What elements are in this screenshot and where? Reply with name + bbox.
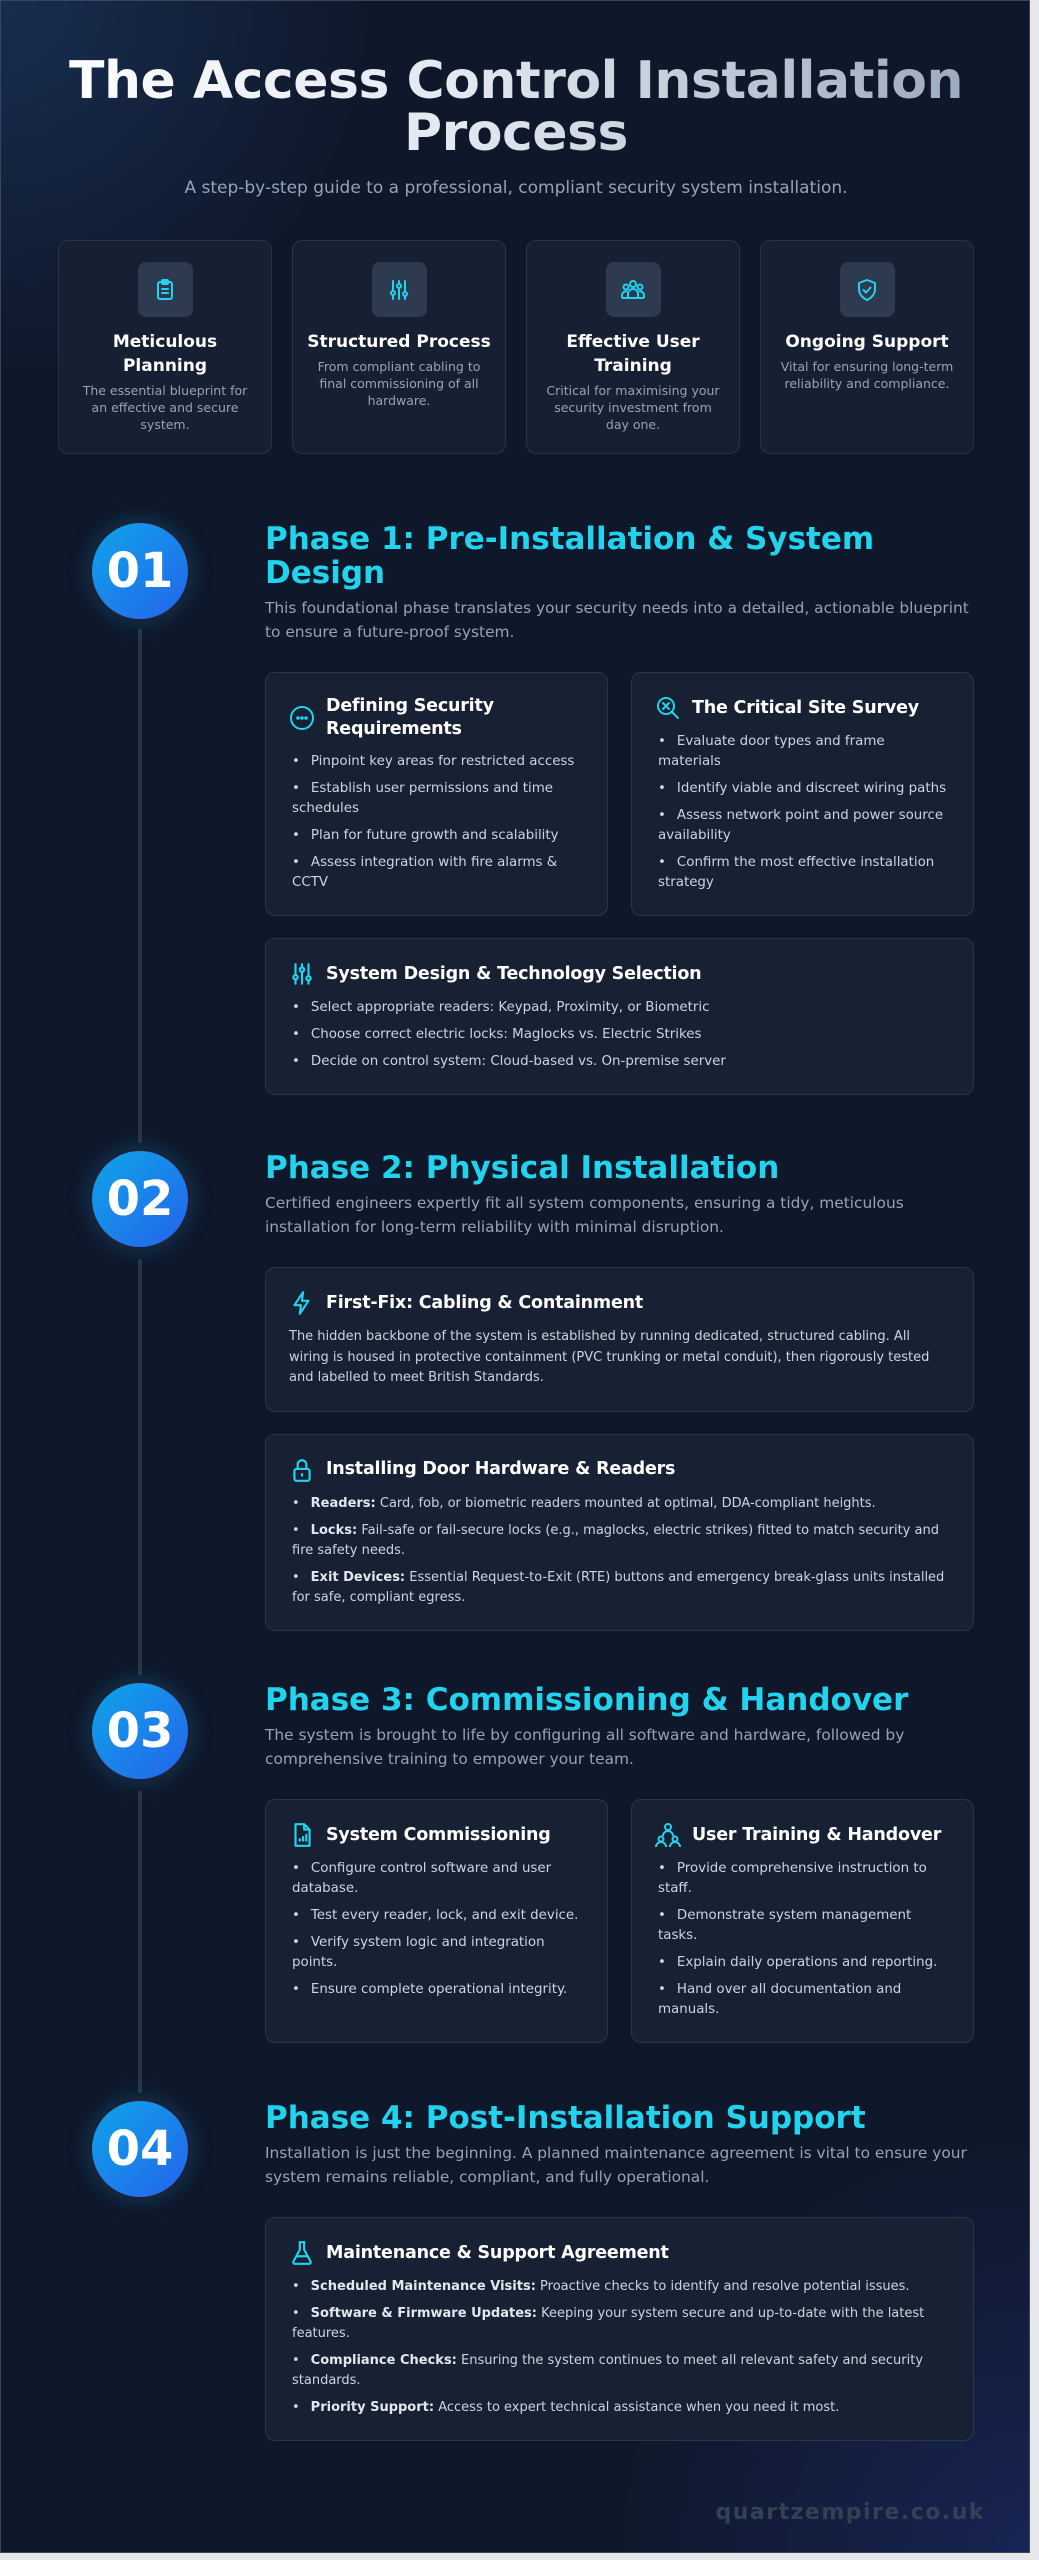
phase 4 number — [92, 2101, 188, 2197]
subtitle: A step-by-step guide to a professional, compliant security system installation. — [184, 178, 848, 198]
card: maintenance & support agreement: Priority Support: Access to expert technical assistance when you need it most. — [311, 2400, 839, 2415]
card: system commissioning: Verify system logic and integration points. — [292, 1935, 545, 1970]
card: system commissioning: Configure control software and user database. — [292, 1861, 551, 1896]
card: defining security requirements: Defining Security Requirements — [326, 696, 494, 739]
card: maintenance & support agreement: Software & Firmware Updates: Keeping your system secure and up-to-date with the latest features. — [292, 2306, 924, 2341]
card: effective user training: Effective User Training — [566, 332, 700, 376]
phase 3 number: 03 — [107, 1703, 173, 1759]
card: system design & technology selection: System Design & Technology Selection — [326, 964, 701, 984]
card: defining security requirements: Assess integration with fire alarms & CCTV — [292, 855, 557, 890]
card: structured process: From compliant cabling to final commissioning of all hardware. — [318, 359, 480, 408]
card: critical site survey: materials — [658, 754, 721, 769]
card: door hardware & readers: Readers: Card, fob, or biometric readers mounted at optimal, DDA-compliant heights. — [311, 1496, 876, 1510]
card: user training & handover: Provide comprehensive instruction to staff. — [658, 1861, 927, 1896]
phase 1 — [264, 521, 974, 1095]
card: maintenance & support agreement: Maintenance & Support Agreement — [326, 2242, 669, 2262]
card: ongoing support: Vital for ensuring long-term reliability and compliance. — [781, 359, 953, 391]
card: structured process: Structured Process — [307, 332, 491, 352]
phase 3 number — [92, 1683, 188, 1779]
card: user training & handover: Explain daily operations and reporting. — [677, 1955, 937, 1970]
phase 1 number: 01 — [107, 543, 173, 599]
card: defining security requirements: Plan for future growth and scalability — [311, 828, 559, 843]
card: effective user training — [526, 240, 740, 454]
phase 4 — [265, 2100, 974, 2441]
card: maintenance & support agreement — [265, 2217, 974, 2441]
card: system commissioning — [265, 1799, 608, 2043]
card: critical site survey: Evaluate door types and frame — [677, 734, 885, 749]
card: maintenance & support agreement: Scheduled Maintenance Visits: Proactive checks to identify and resolve potential issues. — [311, 2279, 910, 2294]
card: system design & technology selection: Choose correct electric locks: Maglocks vs. Electric Strikes — [311, 1027, 701, 1042]
footer brand: quartzempire.co.uk — [716, 2500, 985, 2525]
card: door hardware & readers: Installing Door Hardware & Readers — [326, 1459, 675, 1479]
card: system commissioning: System Commissioning — [326, 1824, 551, 1844]
card: user training & handover — [631, 1799, 974, 2043]
card: meticulous planning: The essential blueprint for an effective and secure system. — [83, 383, 247, 432]
phase 4: Phase 4: Post-Installation Support — [265, 2100, 866, 2136]
card: door hardware & readers: Exit Devices: Essential Request-to-Exit (RTE) buttons and emergency break-glass units installed for safe, compliant egress. — [292, 1570, 944, 1604]
phase 4: Installation is just the beginning. A planned maintenance agreement is vital to ensure your system remains reliable, compliant, and fully operational. — [265, 2144, 967, 2186]
card: first-fix cabling: First-Fix: Cabling & Containment — [326, 1292, 643, 1312]
phase 1: Phase 1: Pre-Installation & System Design — [265, 521, 874, 591]
card: structured process — [292, 240, 506, 454]
card: effective user training: Critical for maximising your security investment from day one. — [546, 383, 720, 432]
card: system commissioning: Ensure complete operational integrity. — [311, 1982, 567, 1997]
card: maintenance & support agreement: Compliance Checks: Ensuring the system continues to meet all relevant safety and security standards. — [292, 2353, 923, 2388]
title: The Access Control Installation — [69, 51, 963, 111]
card: critical site survey — [631, 672, 974, 916]
phase 2 — [265, 1150, 974, 1631]
card: critical site survey: Identify viable and discreet wiring paths — [677, 781, 946, 796]
card: critical site survey: Confirm the most effective installation strategy — [658, 855, 934, 890]
card: critical site survey: Assess network point and power source availability — [658, 808, 943, 843]
card: first-fix cabling: The hidden backbone of the system is established by running dedicated, structured cabling. All wiring is housed in protective containment (PVC trunking or metal conduit), then rigorously tested and labelled to meet British Standards. — [289, 1329, 929, 1385]
card: ongoing support — [760, 240, 974, 454]
card: critical site survey: The Critical Site Survey — [692, 698, 919, 718]
card: user training & handover: User Training & Handover — [692, 1824, 941, 1844]
card: defining security requirements: Establish user permissions and time schedules — [292, 781, 553, 816]
title: Process — [404, 103, 628, 163]
card: door hardware & readers — [265, 1434, 974, 1630]
card: defining security requirements — [265, 672, 608, 916]
phase 3: The system is brought to life by configuring all software and hardware, followed by comprehensive training to empower your team. — [265, 1726, 904, 1768]
phase 2 number — [92, 1151, 188, 1247]
phase 1: This foundational phase translates your security needs into a detailed, actionable blueprint to ensure a future-proof system. — [265, 599, 969, 641]
card: door hardware & readers: Locks: Fail-safe or fail-secure locks (e.g., maglocks, electric strikes) fitted to match security and fire safety needs. — [292, 1522, 939, 1558]
card: meticulous planning — [58, 240, 272, 454]
title — [1, 55, 1031, 159]
phase 2: Phase 2: Physical Installation — [265, 1150, 779, 1186]
phase 3 — [264, 1682, 974, 2043]
card: ongoing support: Ongoing Support — [785, 332, 949, 352]
card: system design & technology selection — [265, 938, 974, 1095]
phase 1 number — [92, 523, 188, 619]
card: user training & handover: Demonstrate system management — [677, 1908, 911, 1923]
phase 2 number: 02 — [107, 1171, 173, 1227]
card: defining security requirements: Pinpoint key areas for restricted access — [311, 754, 574, 769]
card: system design & technology selection: Decide on control system: Cloud-based vs. On-premise server — [311, 1054, 726, 1069]
phase 2: Certified engineers expertly fit all system components, ensuring a tidy, meticulous installation for long-term reliability with minimal disruption. — [265, 1194, 904, 1236]
card: system design & technology selection: Select appropriate readers: Keypad, Proximity, or Biometric — [311, 1000, 710, 1015]
feature cards — [58, 240, 974, 454]
phase 3: Phase 3: Commissioning & Handover — [265, 1682, 908, 1718]
phase 4 number: 04 — [107, 2121, 173, 2177]
card: user training & handover: Hand over all documentation and manuals. — [658, 1982, 901, 2017]
card: first-fix cabling — [265, 1267, 974, 1412]
card: meticulous planning: Meticulous Planning — [113, 332, 217, 376]
card: system commissioning: Test every reader, lock, and exit device. — [311, 1908, 578, 1923]
card: user training & handover: tasks. — [658, 1928, 697, 1943]
